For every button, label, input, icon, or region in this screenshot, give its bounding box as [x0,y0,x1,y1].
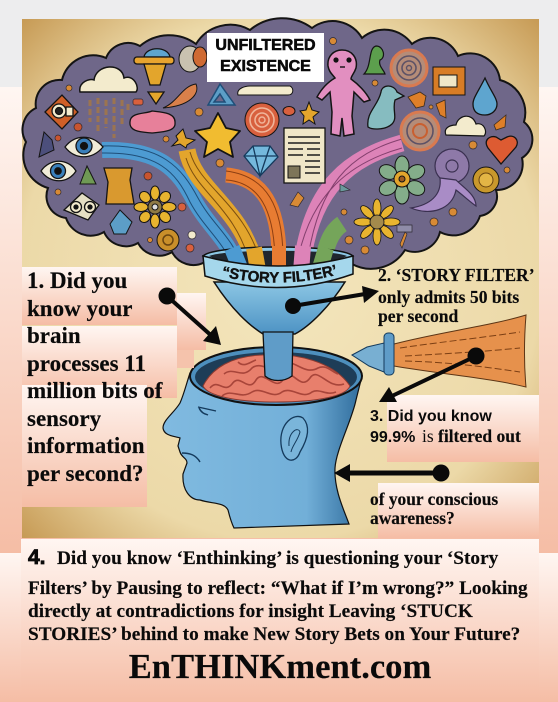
icon: lower spiral [401,112,439,150]
icon: blue diamond [244,146,278,176]
text: claim one: million bits of [27,378,163,403]
icon: purple ribbon [411,149,476,211]
panel: claim three [387,395,539,462]
icon: small cloud [445,116,486,136]
icon: red small star [300,102,319,124]
text: claim four: directly at contradictions for insight Leaving ‘STUCK [28,601,473,622]
icon: duck [368,86,404,129]
icon: eye lower [41,161,76,181]
beam texture [400,332,520,372]
icon: water drop [473,78,497,115]
brain folds [210,360,344,396]
icon: squid [163,84,197,108]
icon: cloud behind label [238,86,293,95]
icon: red spiral [245,103,279,137]
text: claim one: brain [27,323,81,348]
icon: blue house [110,210,132,234]
icon: pink blob [130,111,175,133]
funnel label: “STORY FILTER’ [223,264,336,283]
funnel band [203,256,353,288]
funnel stem [263,332,293,380]
text: claim four: Filters’ by Pausing to reflect: “What if I’m wrong?” Looking [28,578,528,599]
brain cavity rim [190,347,362,405]
text: claim three: 99.9% [370,429,415,446]
icon: upper spiral [391,50,427,86]
nozzle [352,333,394,375]
text: claim one: sensory [27,406,102,431]
thought cloud [23,18,532,269]
label box: unfiltered existence: UNFILTERED [215,37,316,54]
icon: red dot [283,106,295,116]
icon: yellow daisy [354,199,400,245]
text: claim three: is [422,426,434,446]
stream: orange [226,171,283,264]
page background: peach gradient [0,87,558,554]
text: claim one: information [27,433,145,458]
icon: rain cloud [80,67,137,138]
icon: orange box [433,67,465,95]
icon: green flower [377,156,427,204]
arrow: to filtered note [379,348,484,402]
icon: parchment [104,168,134,204]
brain [203,354,350,402]
orange beam [394,315,526,387]
icon: big yellow star [195,113,240,157]
icon: pair of eyes [64,193,99,220]
icon: blue triangle [208,84,235,105]
icon: document [284,128,325,183]
text: claim one: 1. Did you [27,268,128,293]
head silhouette [163,373,362,528]
text: claim four: 4. [28,546,46,569]
funnel back rim [203,247,353,262]
text: claim one: per second? [27,461,144,486]
ear [281,416,308,460]
text: claim one: know your [27,296,132,321]
funnel opening [209,251,347,266]
icon: orange splats [408,92,506,130]
icon: leaf [80,166,96,184]
icon: scattered bits [55,38,510,254]
icon: gold swirl [157,229,179,251]
panel: claim three continued [378,483,539,538]
panel: claim four [21,539,539,702]
stream: yellow [186,150,261,264]
stream: pink [297,139,402,264]
page background: grey band [0,0,558,87]
icon: small star [172,129,195,148]
illustration background [22,19,539,538]
text: claim three: filtered out [438,426,521,446]
text: claim four: STORIES’ behind to make New Story Bets on Your Future? [28,624,520,645]
stream ends inside funnel [232,246,326,272]
text: claim two: 2. ‘STORY FILTER’ [378,265,534,285]
stream: blue [102,146,241,264]
text: claim two: per second [378,306,459,326]
funnel cone [214,282,345,334]
head [163,332,362,528]
label box: unfiltered existence [207,33,324,82]
icon: eye upper [65,137,103,157]
page background: lower peach gradient [0,553,558,702]
icon: green shape [364,46,385,74]
funnel [202,245,354,335]
icon: sun flower [134,186,176,228]
icon: orange eye [45,95,78,129]
icon: gold coin [473,167,499,193]
text: claim two: only admits 50 bits [378,287,519,307]
text: conscious awareness: awareness? [370,508,455,528]
arrow: to head [334,464,450,482]
arrow: to filter note [285,286,379,314]
icon: pink figure [317,50,370,136]
icon: lamp [134,49,174,104]
label box: unfiltered existence: EXISTENCE [220,58,311,75]
icon: stone bundle [179,46,207,72]
icon: heart [486,136,517,164]
stream: green [322,224,342,266]
face details [182,407,216,462]
panel: claim one pieces [22,267,206,507]
text: claim four: Did you know ‘Enthinking’ is questioning your ‘Story [57,548,499,569]
brain cavity [195,352,357,402]
website address: EnTHINKment.com [129,648,431,686]
text: claim one: processes 11 [27,351,146,376]
icon: small figure [39,132,54,157]
arrow: to brain [158,288,221,345]
text: conscious awareness: of your conscious [370,489,498,509]
text: claim three: 3. Did you know [370,408,492,425]
funnel label path [212,272,347,283]
